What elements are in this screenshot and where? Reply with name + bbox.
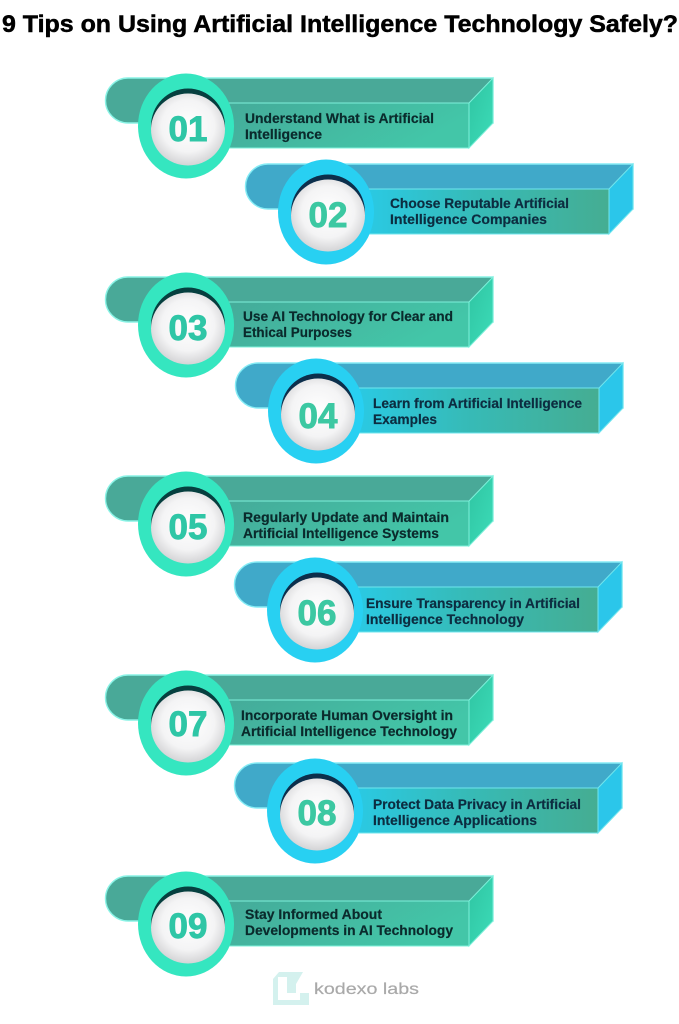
tip 04: [236, 358, 623, 464]
title: 9 Tips on Using Artificial Intelligence Technology Safely?: [2, 11, 678, 38]
logo: kodexo labs: kodexo labs: [314, 981, 419, 998]
tip 07: 07: [169, 705, 207, 744]
tip 08: Intelligence Applications: [373, 813, 537, 828]
tip 06: Ensure Transparency in Artificial: [366, 596, 580, 611]
tip 01: [106, 74, 493, 178]
tip 01: Intelligence: [245, 127, 322, 142]
tip 05: [106, 472, 493, 576]
tip 04: Examples: [373, 412, 437, 427]
tip 05: Artificial Intelligence Systems: [243, 526, 439, 541]
tip 03: 03: [169, 309, 207, 348]
tip 02: 02: [309, 196, 347, 235]
tip 02: [246, 160, 633, 264]
tip 03: [106, 272, 493, 378]
tip 03: Use AI Technology for Clear and: [243, 309, 453, 324]
tip 02: Choose Reputable Artificial: [390, 196, 569, 211]
tip 09: Stay Informed About: [245, 907, 383, 922]
tip 03: Ethical Purposes: [243, 325, 352, 340]
tip 07: Artificial Intelligence Technology: [241, 724, 457, 739]
tip 09: Developments in AI Technology: [245, 923, 453, 938]
tip 05: 05: [169, 508, 207, 547]
tip 08: Protect Data Privacy in Artificial: [373, 797, 581, 812]
tip 07: Incorporate Human Oversight in: [241, 708, 453, 723]
tip 06: 06: [298, 594, 336, 633]
tip 04: 04: [299, 397, 338, 436]
tip 07: [106, 670, 493, 776]
tip 08: [234, 758, 622, 864]
logo: kodexo labs: [273, 972, 419, 1005]
tip 01: Understand What is Artificial: [245, 111, 434, 126]
tip 09: 09: [169, 907, 207, 946]
tip 08: 08: [298, 794, 336, 833]
tip 06: Intelligence Technology: [366, 612, 524, 627]
tip 04: Learn from Artificial Intelligence: [373, 396, 582, 411]
tip 05: Regularly Update and Maintain: [243, 510, 449, 525]
tip 01: 01: [169, 110, 207, 149]
tip 06: [234, 558, 622, 662]
tip 09: [106, 872, 493, 976]
tip 02: Intelligence Companies: [390, 212, 547, 227]
